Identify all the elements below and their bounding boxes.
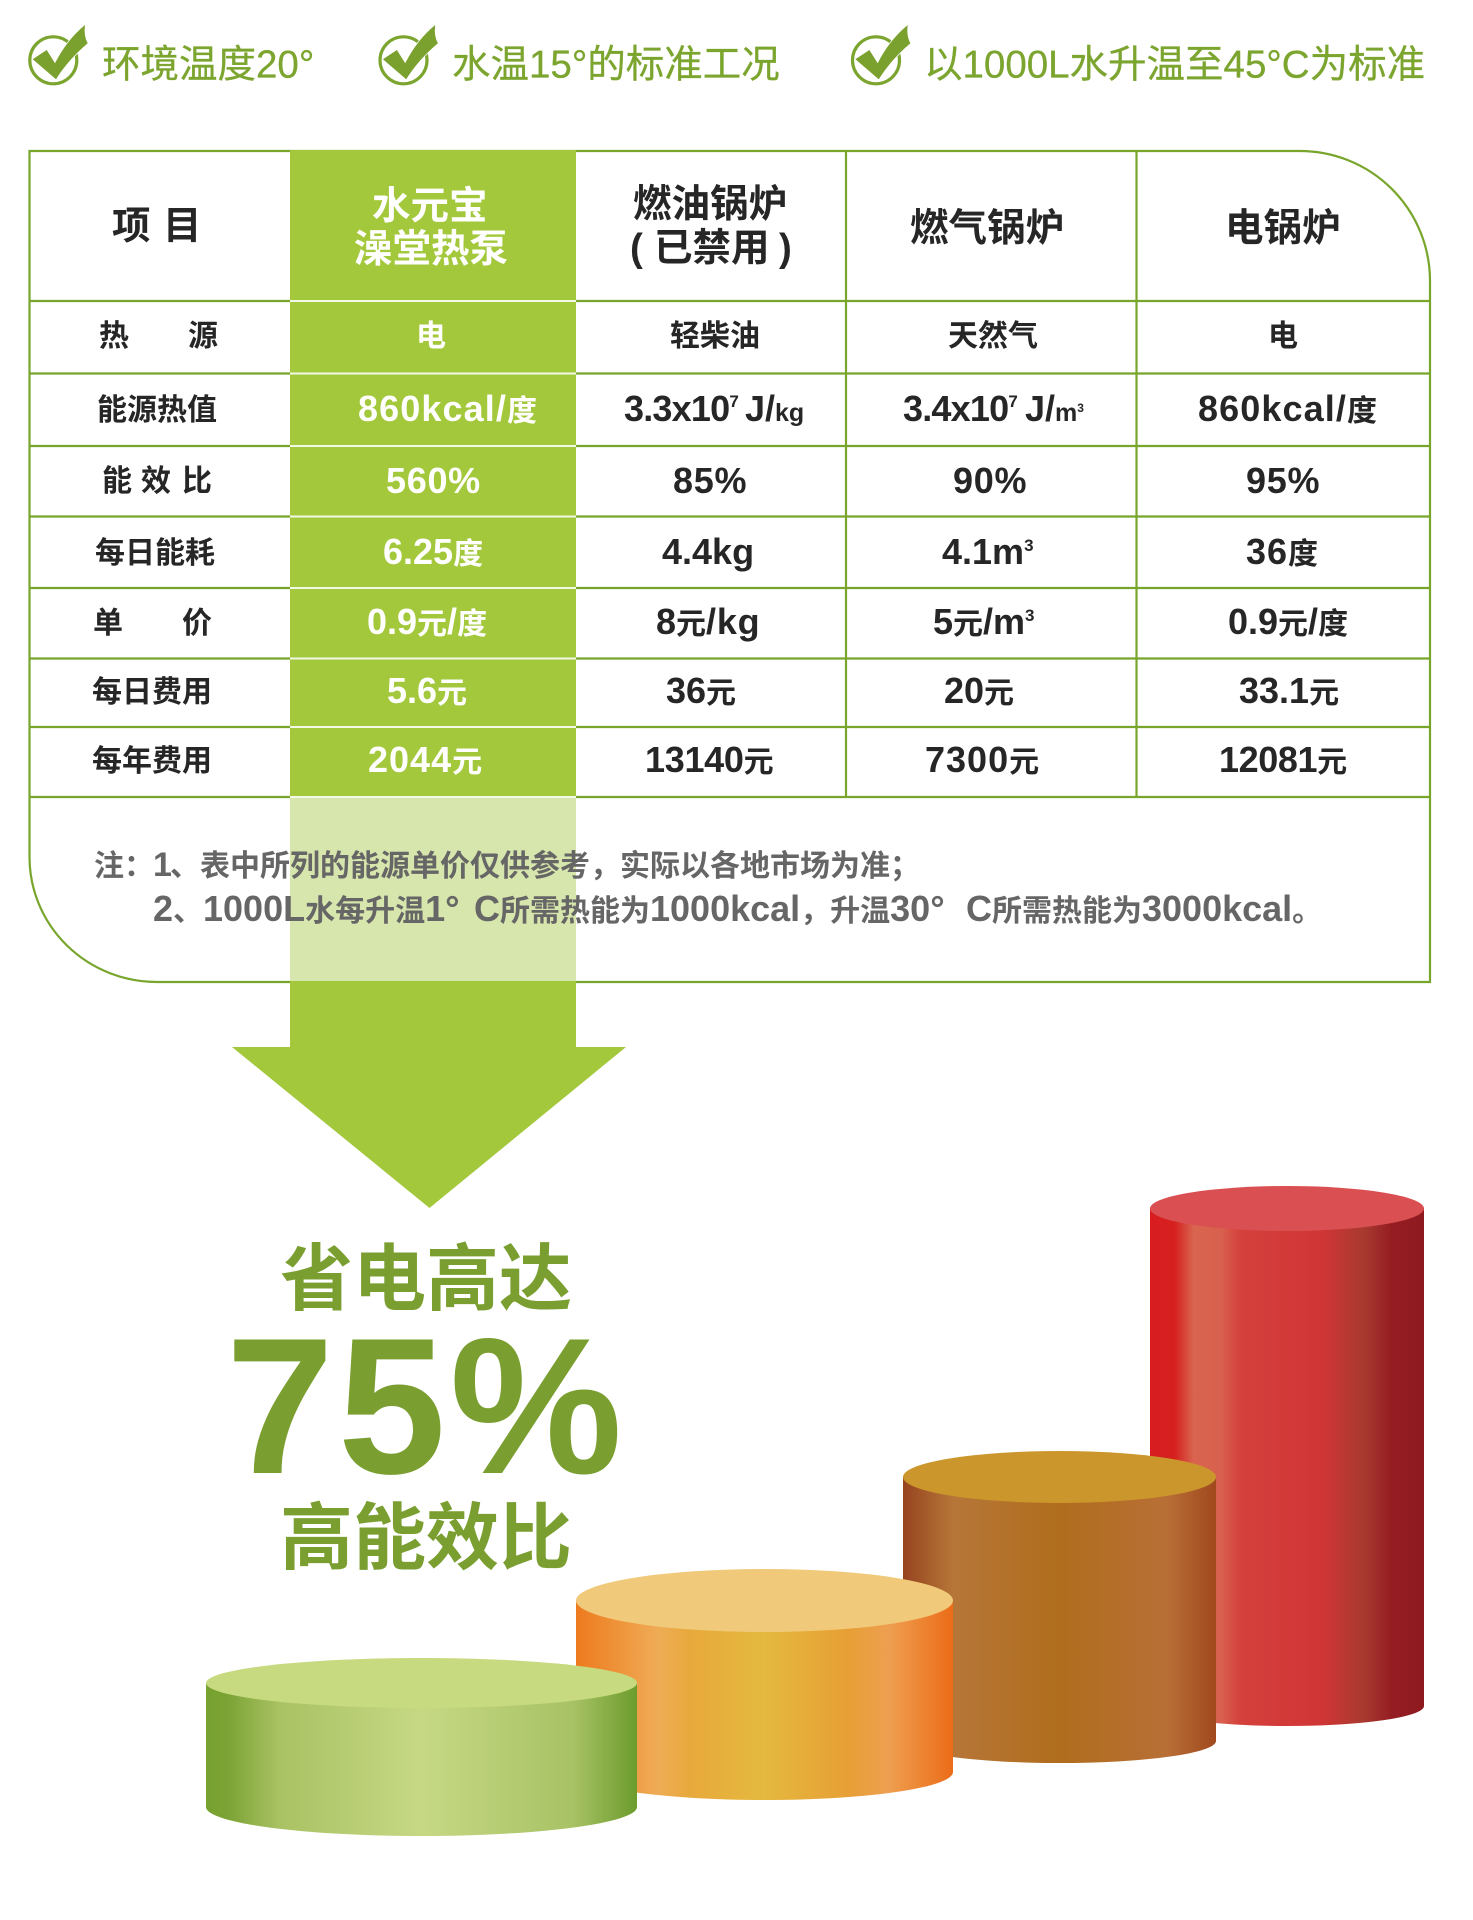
row: energy value: 3.3x10	[624, 388, 729, 429]
headline: high efficiency: 高能效比	[280, 1498, 572, 1579]
row: energy value: kg	[775, 399, 804, 427]
header: electric boiler: 电锅炉	[1225, 207, 1341, 250]
row: energy value: J/	[745, 388, 775, 429]
cylinder: orange	[576, 1569, 953, 1800]
cylinder: green	[206, 1658, 637, 1836]
row: daily energy use: 3	[1024, 536, 1034, 555]
comparison table	[29, 150, 1430, 1208]
cylinder chart	[206, 1186, 1424, 1836]
header: highlighted product: 澡堂热泵	[354, 228, 508, 271]
row: daily energy use: 每日能耗	[95, 537, 215, 570]
condition text 1: 环境温度20°	[102, 44, 314, 86]
row: energy value: 7	[729, 392, 739, 411]
row: daily energy use	[95, 531, 1318, 572]
footnotes: 、表中所列的能源单价仅供参考，实际以各地市场为准；	[170, 850, 920, 883]
row: energy value: 860kcal/度	[358, 388, 537, 429]
highlighted column with arrow	[232, 150, 626, 1208]
row: unit price: 5元/m	[933, 601, 1025, 642]
header: oil boiler: 已禁用	[654, 227, 770, 270]
row: yearly cost: 2044元	[368, 739, 482, 780]
row: yearly cost: 每年费用	[92, 745, 212, 778]
conditions header row	[30, 25, 1425, 86]
headline: saving: 省电高达	[280, 1239, 572, 1320]
row: energy value	[97, 388, 1377, 429]
header: item: 项	[112, 205, 151, 248]
row: unit price: 0.9元/度	[367, 601, 487, 642]
condition text 3: 以1000L水升温至45°C为标准	[924, 44, 1425, 86]
row: unit price: 单	[93, 607, 123, 640]
row: efficiency ratio: 560%	[386, 460, 481, 501]
cylinder: red	[1150, 1186, 1424, 1726]
row: efficiency ratio: 能	[102, 465, 132, 498]
footnotes	[94, 846, 1322, 929]
row: heat source: 电	[416, 320, 446, 353]
row: energy value: m	[1055, 399, 1077, 427]
row: unit price: 价	[182, 607, 212, 640]
row: yearly cost: 12081元	[1219, 739, 1347, 780]
header: item: 目	[163, 205, 202, 248]
condition text 2: 水温15°的标准工况	[452, 44, 780, 86]
header: highlighted product: 水元宝	[372, 185, 488, 228]
row: unit price: 8元/kg	[656, 601, 760, 642]
icon: check mark 1	[30, 25, 88, 84]
row: daily cost: 20元	[944, 670, 1014, 711]
row: efficiency ratio: 95%	[1246, 460, 1320, 501]
footnotes: 1000L	[203, 888, 305, 929]
row: daily energy use: 36度	[1246, 531, 1318, 572]
row: daily energy use: 4.4kg	[662, 531, 754, 572]
row: efficiency ratio: 85%	[673, 460, 747, 501]
footnotes: 所需热能为3000kcal。	[992, 888, 1322, 929]
row: heat source: 热	[99, 320, 129, 353]
row: heat source: 轻柴油	[670, 320, 760, 353]
row: efficiency ratio: 比	[182, 465, 212, 498]
row: heat source: 源	[188, 320, 218, 353]
row: daily cost: 33.1元	[1239, 670, 1339, 711]
footnotes: C	[966, 888, 992, 929]
row: unit price	[93, 601, 1348, 642]
row: daily cost	[92, 670, 1339, 711]
footnotes: C	[474, 888, 500, 929]
icon: check mark 3	[852, 25, 910, 84]
row: unit price: 0.9元/度	[1228, 601, 1348, 642]
row: energy value: 3	[1077, 401, 1084, 415]
footnotes: 水每升温1°	[305, 888, 460, 929]
row: daily energy use: 6.25度	[383, 531, 483, 572]
header row	[112, 183, 1341, 271]
row: efficiency ratio: 90%	[953, 460, 1027, 501]
header: oil boiler: 燃油锅炉	[633, 183, 787, 226]
row: heat source	[99, 320, 1298, 353]
footnotes: 1	[153, 846, 172, 884]
row: energy value: J/	[1025, 388, 1055, 429]
header: oil boiler: )	[779, 227, 792, 270]
row: unit price: 3	[1025, 606, 1035, 625]
row: daily cost: 36元	[666, 670, 736, 711]
row: efficiency ratio: 效	[141, 465, 171, 498]
headline: 75 percent: 75%	[226, 1298, 626, 1515]
footnotes: 所需热能为1000kcal，升温30°	[500, 888, 945, 929]
row: energy value: 860kcal/度	[1198, 388, 1377, 429]
row: yearly cost	[92, 739, 1347, 780]
header: gas boiler: 燃气锅炉	[910, 207, 1064, 250]
row: energy value: 7	[1008, 392, 1018, 411]
footnotes: 2、	[153, 888, 203, 929]
footnotes: 注：	[94, 850, 154, 883]
cylinder: brown	[903, 1451, 1216, 1763]
header: highlighted product	[354, 185, 508, 271]
header: oil boiler	[630, 183, 792, 270]
row: daily cost: 5.6元	[387, 670, 467, 711]
icon: check mark 2	[380, 25, 438, 84]
row: heat source: 天然气	[948, 320, 1038, 353]
row: heat source: 电	[1268, 320, 1298, 353]
header: oil boiler: (	[630, 227, 643, 270]
row: daily cost: 每日费用	[92, 676, 212, 709]
table frame and grid lines	[29, 151, 1430, 982]
row: yearly cost: 13140元	[645, 739, 774, 780]
row: daily energy use: 4.1m	[942, 531, 1024, 572]
row: energy value: 3.4x10	[903, 388, 1008, 429]
row: yearly cost: 7300元	[925, 739, 1039, 780]
row: energy value: 能源热值	[97, 394, 217, 427]
row: efficiency ratio	[102, 460, 1320, 501]
